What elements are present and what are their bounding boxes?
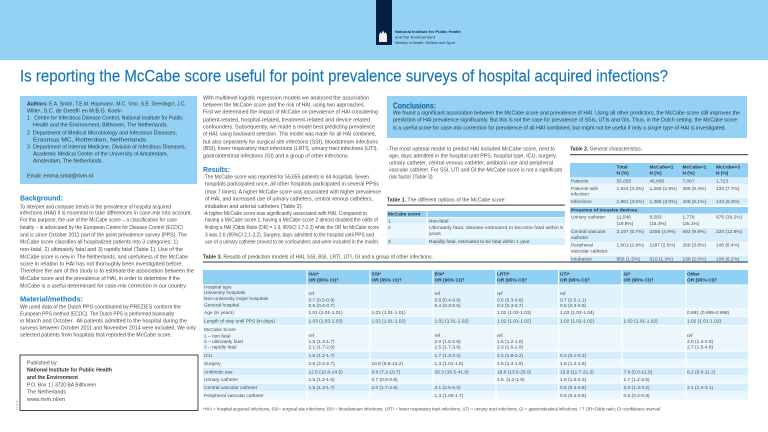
table 3 row labels: Urinary catheter xyxy=(204,377,239,383)
table 3 row labels: McCabe Score xyxy=(204,327,236,333)
table 2: general characteristics: (19.8%) xyxy=(616,221,634,227)
table 1: McCabe options: 3 xyxy=(388,239,391,245)
table 3 column: HAI: ref xyxy=(308,291,315,297)
table 3 column: GI: 7.9 (5.0-12.5) xyxy=(624,370,653,376)
table 3 column: UTI: 0.5 (0.3-0.8) xyxy=(560,385,587,391)
table 2: general characteristics: 143 (8.3%) xyxy=(716,199,740,205)
table 2: general characteristics: catheter xyxy=(571,235,589,241)
table 2: general characteristics: vascular catheter xyxy=(571,248,608,254)
table 3 column: UTI: 1.6 (1.2-1.8) xyxy=(560,361,587,367)
table 3 column: LRTI xyxy=(497,291,532,383)
table 3: prediction models: LRTI* xyxy=(497,272,510,278)
text block: results xyxy=(203,175,381,246)
table 3 row labels: General hospital xyxy=(204,302,239,308)
table 3 row labels: 3 – rapidly fatal xyxy=(204,344,237,350)
table 1: McCabe options: Rapidly fatal, estimated to be fatal within 1 year xyxy=(429,239,530,245)
text block: background: McCabe is a useful determinant for case-mix correction in our country. xyxy=(20,283,187,289)
table 2: general characteristics: 133 (7.7%) xyxy=(716,186,740,192)
panel: authors: 1 Centre for Infectious Disease Control, National Institute for Public xyxy=(27,115,184,121)
text block: analysis methods: confounders. Subsequently, we made a model best predicting prevalence xyxy=(203,125,375,131)
table 3 row labels xyxy=(204,284,275,399)
text block: optimal model xyxy=(387,146,563,181)
text block: background: McCabe score classifies all hospitalized patients into 3 categories: 1) xyxy=(20,240,178,246)
header band xyxy=(0,0,768,60)
panel: authors: Wille¹, S.C. de Greeff¹ en M.B.G. Koek¹ xyxy=(27,108,122,114)
panel: authors: 3 Department of Internal Medicine, Division of Infectious Diseases, xyxy=(27,145,186,151)
table 3 column: LRTI: ref xyxy=(497,333,503,339)
table 3 row labels: ICU xyxy=(204,353,213,359)
table 3 column: BSI: 1.7 (1.3-2.2) xyxy=(434,353,461,359)
table 2: general characteristics: Patients xyxy=(571,179,589,185)
table 3: prediction models: OR (95% CI)† xyxy=(308,278,339,284)
text block: results: use of a urinary catheter proved to be confounders and were included in the model. xyxy=(205,240,379,246)
panel: authors: Health and the Environment, Bilthoven, The Netherlands. xyxy=(33,123,168,129)
text block: background: infections (HAI) it is essential to take differences in case-mix into account. xyxy=(20,210,192,216)
table 3 column: LRTI: 18.6 (13.5-25.0) xyxy=(497,370,532,376)
panel: conclusions xyxy=(387,96,747,138)
table 2: general characteristics: Patients with xyxy=(571,186,599,192)
text block: analysis methods xyxy=(203,95,379,160)
table 2: general characteristics: 2285 (4.9%) xyxy=(650,229,676,235)
table 2: general characteristics: 1187 (2.5%) xyxy=(650,242,676,248)
table 1: McCabe options: McCabe score xyxy=(388,212,421,218)
table 2: general characteristics: Central vascular xyxy=(571,229,606,235)
table 2: general characteristics: (25.1%) xyxy=(682,221,700,227)
table 2: general characteristics: infection xyxy=(571,192,589,198)
text block: background: To interpret and compare trends in the prevalence of hospital acquired xyxy=(20,204,171,210)
table 3 column: other: 2.0 (1.4-2.9) xyxy=(687,339,714,345)
table 3 column: HAI: 1.5 (1.3-1.7) xyxy=(308,339,335,345)
heading: material and methods: Material/methods: xyxy=(20,294,83,304)
text block: optimal model: risk factor (Table 3). xyxy=(389,175,434,181)
text block: results: of HAI, and increased use of urinary catheters, central venous catheters, xyxy=(205,197,373,203)
table 3 row labels: University hospitals xyxy=(204,290,246,296)
text block: results: finding a HAI (Odds Ratio (OR) = 1.9, 95%CI 1.7-2.2) while the OR for McCabe score xyxy=(205,225,379,231)
table 2: general characteristics: McCabe=2 xyxy=(682,164,707,170)
text block: background: McCabe score is new in The Netherlands, and usefulness of the McCabe xyxy=(20,254,188,260)
table 3 column: LRTI: 1.5 (1.2-1.9) xyxy=(497,377,525,383)
text block: methods: We used data of the Dutch PPS coordinated by PREZIES conform the xyxy=(20,304,181,310)
table 3 column: BSI: 1.3 (1.06-1.7) xyxy=(434,393,464,399)
table 3 column: UTI: 0.7 (0.5-1.1) xyxy=(560,298,587,304)
table 3 column: other: 8.2 (6.0-11.2) xyxy=(687,370,716,376)
table 2: general characteristics: N (%) xyxy=(716,170,729,176)
panel: published by: The Netherlands xyxy=(27,390,67,396)
table 2: general characteristics: 106 (6.2%) xyxy=(716,257,740,263)
text block: methods: surveys between October 2011 and November 2014 were included. We only xyxy=(20,325,197,331)
text block: methods: selected patients from hospitals that reported the McCabe score. xyxy=(20,333,172,339)
logo: national institute: Ministry of Health, Welfare and Sport xyxy=(395,41,455,45)
table 3 column: SSI: 1.02 (1.01-1.02) xyxy=(372,319,406,325)
table 3 column: HAI: 1.6 (1.2-1.5) xyxy=(308,377,335,383)
text block: background xyxy=(20,204,194,289)
table 3 column: BSI: 3.1 (2.6-6.0) xyxy=(434,385,461,391)
table 3 column: SSI: 10.8 (8.8-13.2) xyxy=(372,361,403,367)
table 3 column: LRTI: 1.5 (1.2-1.8) xyxy=(497,339,524,345)
table 3 column: UTI: 1.9 (1.5-2.3) xyxy=(560,377,587,383)
table 2: general characteristics: Table 2. General characteristics. xyxy=(570,147,642,153)
table 3 row labels: Surgery xyxy=(204,361,221,367)
table 3 column: BSI: ref xyxy=(434,291,441,297)
table 3 column: HAI: 0.6 (0.4-0.7) xyxy=(308,303,335,309)
panel: published by: and the Environment xyxy=(27,375,78,381)
table 2: general characteristics: 8,593 xyxy=(650,215,662,221)
table 3: prediction models: OR (95% CI)† xyxy=(497,278,527,284)
text block: results: -A higher McCabe score was significantly associated with HAI. Compared to xyxy=(203,211,367,217)
table 3 column: LRTI: 2.4 (1.8-3.2) xyxy=(497,353,524,359)
text block: results: intubation and arterial catheters (Table 2). xyxy=(205,204,303,210)
table 2: general characteristics: Infections xyxy=(571,199,592,205)
panel: authors: Amsterdam, The Netherlands. xyxy=(33,159,103,165)
table 3 column: SSI: 0.7 (0.6-0.8) xyxy=(372,377,398,383)
text block: background: score in relation to HAI has not thoroughly been investigated before. xyxy=(20,261,183,267)
table 1: McCabe options: Non-fatal xyxy=(429,218,448,224)
panel: published by: National Institute for Public Health xyxy=(27,368,112,374)
panel: authors: Email: emma.smid@rivm.nl xyxy=(27,173,93,179)
text block: results: having a McCabe score 1, having a McCabe score 2 almost doubled the odds of xyxy=(205,218,379,224)
table 3 row labels: 1 – non fatal xyxy=(204,334,230,340)
text block: analysis methods: gastrointestinal infections (GI) and a group of other infections. xyxy=(203,154,349,160)
text block: optimal model: urinary catheter, central venous catheter, antibiotic use and peripheral xyxy=(389,161,553,167)
table 3 column: GI xyxy=(624,319,658,399)
table 3 column: BSI: ref xyxy=(434,333,441,339)
table 2: general characteristics: 145 (8.4%) xyxy=(716,242,740,248)
table 2: general characteristics: Total xyxy=(616,164,628,170)
panel: authors xyxy=(20,96,197,184)
table 3 column: UTI: 1.02 (1.02-1.02) xyxy=(560,319,595,325)
text block: results: -The McCabe score was reported for 55,655 patients in 64 hospitals. Seven xyxy=(203,175,369,181)
table 2: general characteristics: 46,865 xyxy=(650,179,665,185)
text block: analysis methods: First we determined the impact of McCabe on prevalence of HAI considering xyxy=(203,110,378,116)
table 3 column: SSI: 8.8 (7.2-10.7) xyxy=(372,370,401,376)
table 3 column: UTI: 0.5 (0.4-0.6) xyxy=(560,393,587,399)
table 1: McCabe options xyxy=(387,198,565,245)
table 3 column: HAI: 1.6 (1.2-1.7) xyxy=(308,353,335,359)
table 2: general characteristics: 269 (3.8%) xyxy=(682,242,706,248)
table 2: general characteristics: 856 (1.5%) xyxy=(616,257,640,263)
table 2: general characteristics: 3,197 (5.7%) xyxy=(616,229,644,235)
table 3 column: BSI: 1.3 (1.01-1.6) xyxy=(434,361,464,367)
table 2: general characteristics: 1,961 (3.5%) xyxy=(616,199,644,205)
panel: published by: www.rivm.nl/en xyxy=(27,397,65,403)
table 3 column: GI: 2.0 (1.3-3.2) xyxy=(624,385,650,391)
table 2: general characteristics: N (%) xyxy=(616,170,629,176)
text block: background: non-fatal, 2) ultimately fatal and 3) rapidly fatal (Table 1). Use of the xyxy=(20,247,183,253)
text block: background: and is since October 2011 part of the point prevalence survey (PPS). The xyxy=(20,232,187,238)
print code: 16-0311 xyxy=(15,399,19,410)
text block: methods xyxy=(20,304,197,339)
table 3 column: SSI: 1.01 (1.01-1.01) xyxy=(372,310,406,316)
table 2: general characteristics: 692 (9.8%) xyxy=(682,229,706,235)
table 2: general characteristics: 1,266 (2.8%) xyxy=(650,186,677,192)
table 3 column: UTI: ref xyxy=(560,291,566,297)
table 2: general characteristics: 610 (1.3%) xyxy=(650,257,673,263)
text block: optimal model: age, days admitted in the hospital until PPS, hospital type, ICU, surgery, xyxy=(389,154,557,160)
table 3 row labels: 2 – ultimately fatal xyxy=(204,339,243,345)
table 2: general characteristics: McCabe=3 xyxy=(716,164,740,170)
table 3: prediction models: GI* xyxy=(624,272,631,278)
table 3 column: LRTI: 1.02 (1.02-1.03) xyxy=(497,310,532,316)
title: Is reporting the McCabe score useful for point prevalence surveys of hospital acquired infections? xyxy=(20,66,668,86)
table 3 column: LRTI: 0.6 (0.3-0.8) xyxy=(497,298,524,304)
text block: results: 3 was 2.6 (95%CI 2.1-3.2). Surgery, days admitted to the hospital until PPS and xyxy=(205,233,374,239)
table 2: general characteristics: 11,046 xyxy=(616,215,631,221)
table 3 column: LRTI: ref xyxy=(497,291,503,297)
table 3 column: SSI: 2.0 (1.7-2.5) xyxy=(372,385,398,391)
table 3 column: BSI: 1.02 (1.01-1.02) xyxy=(434,319,469,325)
table 3 row labels: Length of stay until PPS (in days) xyxy=(204,319,275,325)
table 3: prediction models: UTI* xyxy=(560,272,570,278)
table 3 column: BSI: 26.3 (16.5-41.8) xyxy=(434,370,469,376)
table 3 column: LRTI: 1.5 (1.3-1.8) xyxy=(497,361,524,367)
text block: analysis methods: With multilevel logistic regression models we analysed the association xyxy=(203,95,369,101)
table 3: prediction models: HAI* xyxy=(308,272,319,278)
text block: background: McCabe score and the prevalence of HAI, in order to determine if the xyxy=(20,276,180,282)
table 3 column: BSI xyxy=(434,291,469,399)
table 2: general characteristics: 428 (6.1%) xyxy=(682,199,706,205)
panel: authors: 2 Department of Medical Microbiology and Infectious Diseases, xyxy=(27,130,177,136)
table 3 column: HAI: 2.1 (1.7-2.6) xyxy=(308,344,335,350)
text block: analysis methods: (BSI), lower respiratory tract infections (LRTI), urinary tract infections (UTI), xyxy=(203,146,378,152)
table 3: prediction models: OR (95% CI)† xyxy=(624,278,654,284)
table 3 column: HAI: ref xyxy=(308,333,315,339)
table 3 column: GI: 0.6 (0.4-0.9) xyxy=(624,393,650,399)
text block: methods: European PPS method (ECDC). The Dutch PPS is performed biannually xyxy=(20,312,174,318)
table 3 column: UTI: 1.03 (1.02-1.04) xyxy=(560,310,595,316)
table 2: general characteristics: 1,723 xyxy=(716,179,728,185)
table 3 column: BSI: 0.4 (0.3-0.6) xyxy=(434,303,461,309)
table 3 column: HAI: 1.5 (1.3-1.7) xyxy=(308,385,335,391)
table 2: general characteristics: 138 (2.0%) xyxy=(682,257,706,263)
logo: national institute xyxy=(376,0,461,45)
table 1: McCabe options: Table 1. The different options of the McCabe score. xyxy=(387,198,506,204)
table 3 column: UTI: 0.2 (0.1-0.3) xyxy=(560,353,587,359)
table 2: general characteristics: 220 (12.8%) xyxy=(716,229,743,235)
table 2: general characteristics: 7,067 xyxy=(682,179,695,185)
table 3: prediction models: BSI* xyxy=(434,272,444,278)
table 2: general characteristics: 1,824 (3.3%) xyxy=(616,186,644,192)
table 3 column: UTI: 15.8 (11.7-21.3) xyxy=(560,370,594,376)
table 1: McCabe options: 1 xyxy=(388,218,391,224)
heading: results: Results: xyxy=(203,165,230,174)
table 2: general characteristics: 675 (39.2%) xyxy=(716,215,743,221)
panel: conclusions: Conclusions: xyxy=(393,102,436,110)
table 2: general characteristics: 55,655 xyxy=(616,179,632,185)
table 3 column: LRTI: 0.4 (0.3-0.7) xyxy=(497,303,524,309)
table 3 column: HAI: 2.6 (2.2-2.7) xyxy=(308,361,335,367)
panel: published by xyxy=(20,355,198,410)
table 3: prediction models: OR (95% CI)† xyxy=(372,278,402,284)
logo: national institute: National Institute for Public Health xyxy=(395,30,461,34)
table 3: prediction models: Other xyxy=(687,272,700,278)
heading: background: Background: xyxy=(20,194,63,202)
table 2: general characteristics: Intubation xyxy=(571,257,592,263)
table 3 column: LRTI: 1.02 (1.01-1.02) xyxy=(497,319,532,325)
table 3 column: other: ref xyxy=(687,333,693,339)
text block: background: Therefore the aim of this study is to estimate the association between the xyxy=(20,269,194,275)
table 3 row labels: Age (in years) xyxy=(204,310,234,316)
panel: conclusions: prediction of HAI prevalence significantly. But this is not the case for prevalence of SSIs, UTIs and GIs. Thus, in the Dutch setting, the McCabe score xyxy=(393,118,737,124)
table 3 column: other: 0.991 (0.985-0.998) xyxy=(687,310,730,316)
panel: conclusions: We found a significant association between the McCabe score and prevalence of HAI. Using all other predictors, the McCabe score still improves the xyxy=(393,111,740,117)
table 2: general characteristics: (18.3%) xyxy=(650,221,667,227)
table 3 column: BSI: 2.0 (1.6-2.6) xyxy=(434,339,461,345)
text block: analysis methods: but also separately for surgical site infections (SSI), bloodstream infections xyxy=(203,140,379,146)
table 3: prediction models xyxy=(203,255,748,400)
table 3 row labels: Central vascular catheter xyxy=(204,385,258,391)
table 3 column: HAI: 12.5 (10.8-14.5) xyxy=(308,370,343,376)
logo: national institute: and the Environment xyxy=(395,35,435,39)
panel: published by: P.O. Box 1 | 3720 BA Bilthoven xyxy=(27,382,96,388)
table 3: prediction models: OR (95% CI)† xyxy=(434,278,465,284)
text block: background: fatality – is advocated by the European Centre for Disease Control (ECDC) xyxy=(20,225,183,231)
table 3 column: BSI: 2.5 (1.7-3.6) xyxy=(434,344,461,350)
table 3 column: BSI: 0.5 (0.4-0.8) xyxy=(434,298,461,304)
table 3: prediction models: OR (95% CI)† xyxy=(687,278,717,284)
panel: conclusions: is a useful score for case-mix correction for prevalence of all HAI combined, but might not be useful if only a single type of HAI is investigated. xyxy=(393,126,726,132)
table 3 column: other: 2.7 (1.5-4.8) xyxy=(687,344,714,350)
table 3 column: other xyxy=(687,310,730,391)
table 2: general characteristics: N (%) xyxy=(682,170,695,176)
table 2: general characteristics: 1,601 (2.9%) xyxy=(616,242,644,248)
table 3 column: SSI xyxy=(372,310,406,391)
text block: analysis methods: patient-related, hospital-related, treatment-related and device related xyxy=(203,118,370,124)
table 3 row labels: Antibiotic use xyxy=(204,370,233,376)
text block: analysis methods: of HAI, using backward selection. This model was made for all HAI combined, xyxy=(203,132,376,138)
text block: optimal model: vascular catheter. For SSI, UTI and GI the McCabe score is not a significant xyxy=(389,168,563,174)
table 3 column: other: 2.1 (1.4-3.1) xyxy=(687,385,714,391)
table 2: general characteristics: N (%) xyxy=(650,170,662,176)
table 3 row labels: Non-university major hospitals xyxy=(204,296,269,302)
table 2: general characteristics: 1,386 (3.0%) xyxy=(650,199,677,205)
table 2: general characteristics: Peripheral xyxy=(571,242,593,248)
text block: optimal model: -The most optimal model to predict HAI included McCabe score, next to xyxy=(387,146,555,152)
table 3 row labels: Hospital type xyxy=(204,284,232,290)
panel: authors: Authors: E.A. Smid¹, T.E.M. Hopmans¹, M.C. Vos², S.E. Geerlings³, J.C. xyxy=(27,102,186,108)
table 1: McCabe options: 2 xyxy=(388,225,391,231)
text block: results: hospitals participated once, all other hospitals participated in several PPSs xyxy=(205,182,380,188)
table 3 column: HAI: 0.7 (0.5-0.9) xyxy=(308,298,335,304)
table 3: prediction models: SSI* xyxy=(372,272,381,278)
table 3 column: GI: 1.7 (1.2-2.5) xyxy=(624,377,650,383)
table 2: general characteristics: 1,776 xyxy=(682,215,695,221)
text block: background: For this purpose, the use of the McCabe score – a classification for case xyxy=(20,218,177,224)
panel: published by: Published by: xyxy=(27,360,58,366)
table 3 column: UTI xyxy=(560,291,595,399)
text block: results: (max 7 times). A higher McCabe score was associated with higher prevalence xyxy=(205,190,381,196)
panel: authors: Academic Medical Center of the University of Amsterdam, xyxy=(33,152,168,158)
table 3: prediction models: OR (95% CI)† xyxy=(560,278,590,284)
panel: authors: Erasmus MC, Rotterdam, Netherlands. xyxy=(33,138,148,144)
text block: methods: in March and October. All patients admitted to the hospital during the xyxy=(20,319,187,325)
table 3 column: UTI: 0.5 (0.3-0.8) xyxy=(560,303,587,309)
table 2: general characteristics: 386 (5.4%) xyxy=(682,186,706,192)
table 3 column: HAI: 1.01 (1.01-1.01) xyxy=(308,310,343,316)
table 3 column: HAI: 1.03 (1.03-1.03) xyxy=(308,319,343,325)
table 3 column: other: 1.02 (1.01-1.02) xyxy=(687,319,722,325)
table 1: McCabe options: years xyxy=(429,231,441,237)
table 3 row labels: Peripheral vascular catheter xyxy=(204,393,264,399)
table 1: McCabe options: Ultimately fatal, disease estimated to become fatal within 5 xyxy=(429,225,563,231)
table 2: general characteristics: Urinary catheter xyxy=(571,215,606,221)
table 3: prediction models: Table 3. Results of prediction models of HAI, SSI, BSI, LRTI, UTI, GI and a group of other infections. xyxy=(203,255,433,261)
table 3 column: HAI xyxy=(308,291,343,391)
table 2: general characteristics: Presence of invasive devices xyxy=(571,208,638,214)
table 2: general characteristics xyxy=(570,147,748,263)
table 2: general characteristics: McCabe=1 xyxy=(650,164,674,170)
table 3 column: GI: 1.02 (1.01-1.02) xyxy=(624,319,658,325)
table 3 column: LRTI: 2.0 (1.5-2.8) xyxy=(497,344,524,350)
text block: analysis methods: between the McCabe score and the risk of HAI, using two approaches. xyxy=(203,103,365,109)
footnote: *HAI = hospital acquired infections, SSI= surgical site infections, BSI = bloodstream infections, LRTI = lower respiratory tract infections, UTI = urinary tract infections, GI = gastrointestinal infections. / † OR=Odds ratio; CI=confidence interval xyxy=(203,407,660,413)
